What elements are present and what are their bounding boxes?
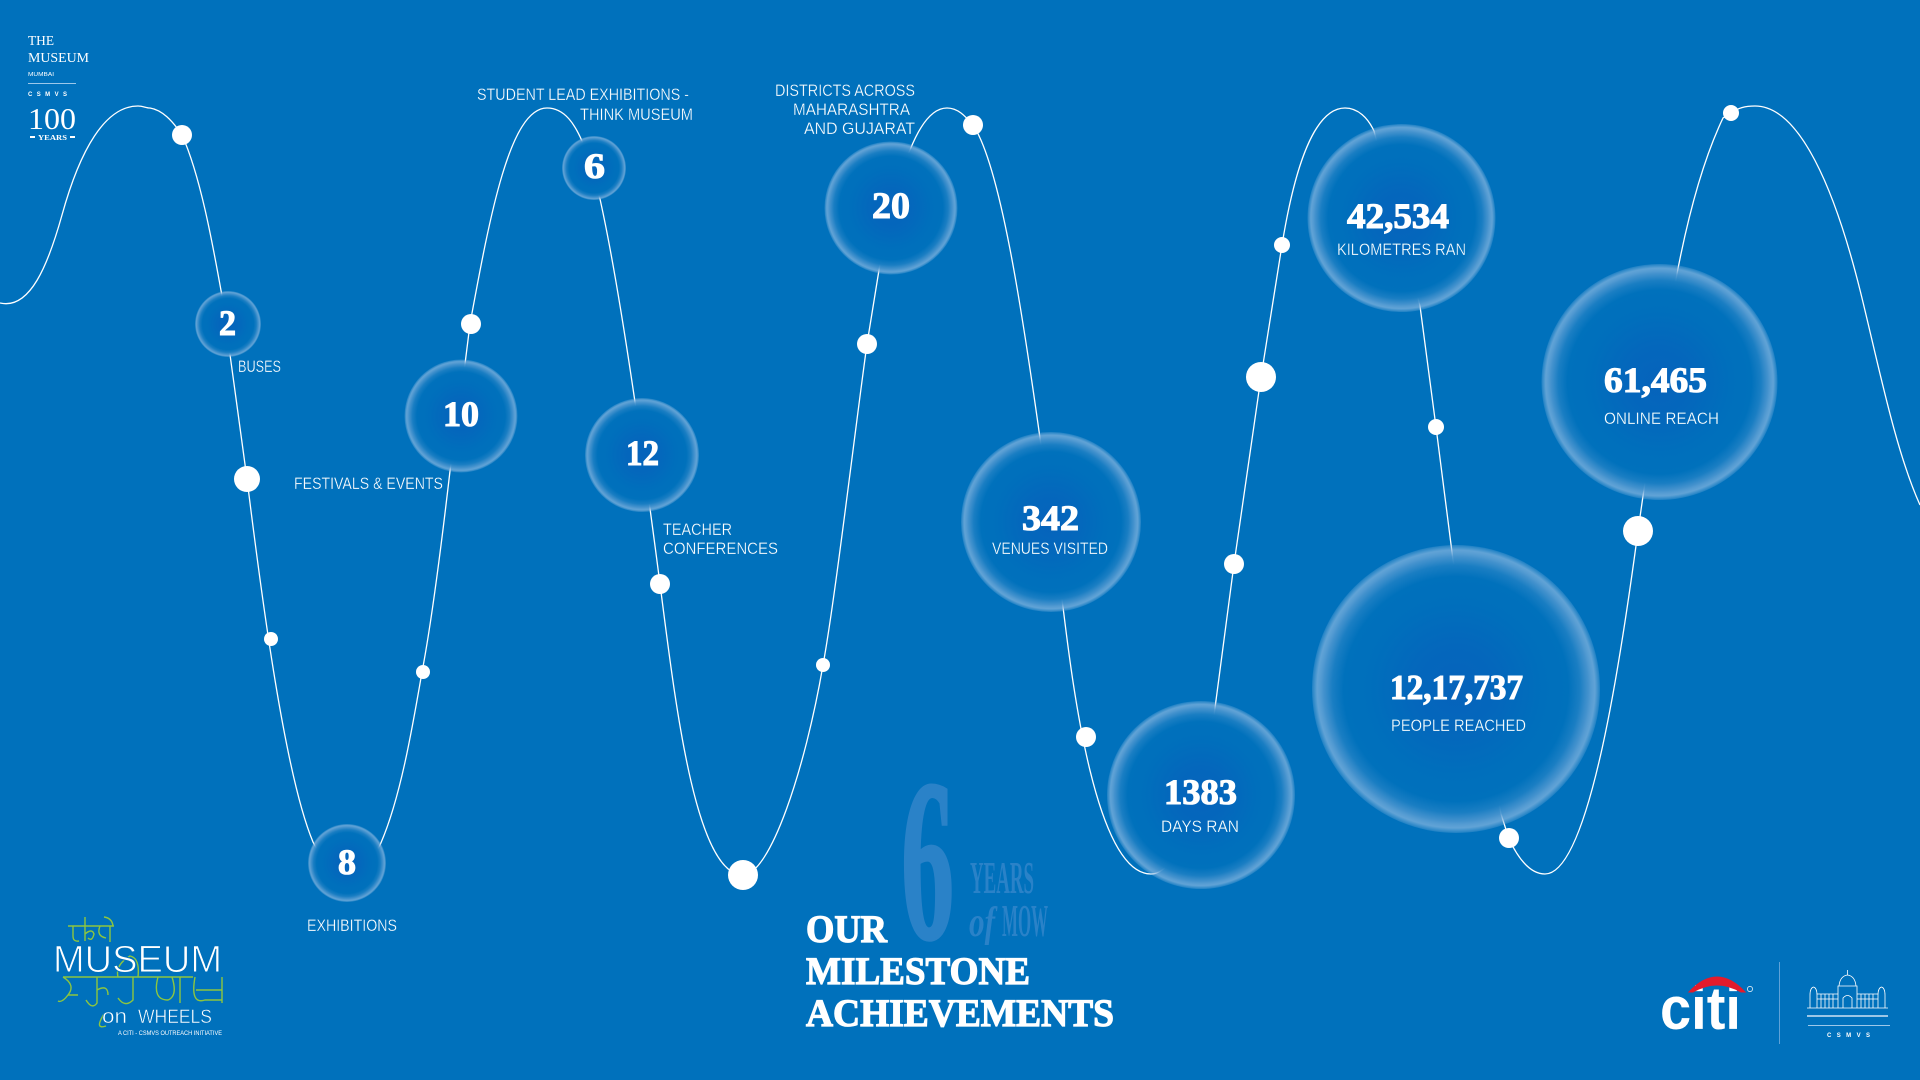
milestone: 12,17,737 people reached: 12,17,737 bbox=[1390, 668, 1523, 707]
logo: citi: citi bbox=[1660, 975, 1741, 1042]
milestone: 2 buses: 2 bbox=[219, 303, 236, 343]
divider bbox=[1779, 962, 1780, 1044]
milestone: 10 festivals and events: 10 bbox=[443, 394, 479, 434]
milestone: 61,465 online reach: 61,465 bbox=[1604, 360, 1707, 400]
milestone: 20 districts: 20 bbox=[872, 186, 910, 227]
logo: The Museum Mumbai 100 years: THE bbox=[28, 34, 54, 49]
logo: The Museum Mumbai 100 years: YEARS bbox=[38, 134, 67, 142]
watermark: 6 years of MoW bbox=[901, 732, 1048, 988]
milestone: 342 venues visited bbox=[961, 432, 1141, 612]
milestone: 61,465 online reach bbox=[1542, 264, 1778, 500]
logo: Museum on Wheels: WHEELS bbox=[138, 1007, 212, 1028]
logo: The Museum Mumbai 100 years: CSMVS bbox=[28, 92, 67, 98]
text: MOW bbox=[1002, 895, 1048, 946]
milestone: 20 districts: MAHARASHTRA bbox=[793, 101, 910, 119]
milestone: 12 teacher conferences bbox=[585, 398, 778, 558]
logo: CSMVS building: CSMVS bbox=[1827, 1033, 1870, 1039]
logo: Museum on Wheels: MUSEUM bbox=[53, 939, 222, 981]
milestone: 1383 days ran: 1383 bbox=[1164, 772, 1237, 812]
milestone: 42,534 kilometres ran: KILOMETRES RAN bbox=[1337, 241, 1466, 259]
milestone: 6 student lead exhibitions: 6 bbox=[584, 146, 605, 186]
milestone: 8 exhibitions: 8 bbox=[338, 842, 356, 882]
logo: The Museum Mumbai 100 years bbox=[28, 34, 90, 142]
watermark: 6 years of MoW: 6 bbox=[901, 732, 954, 988]
milestone: 10 festivals and events bbox=[294, 360, 518, 493]
milestone: 6 student lead exhibitions: STUDENT LEAD EXHIBITIONS - bbox=[477, 86, 689, 104]
milestone: 342 venues visited: VENUES VISITED bbox=[992, 540, 1108, 558]
milestone: 42,534 kilometres ran bbox=[1308, 124, 1496, 312]
logo: Museum on Wheels bbox=[53, 917, 222, 1037]
logo: Museum on Wheels: on bbox=[102, 1006, 127, 1028]
milestone: 20 districts bbox=[775, 82, 958, 274]
milestone: 12 teacher conferences: TEACHER bbox=[663, 521, 732, 539]
milestone: 6 student lead exhibitions bbox=[477, 86, 693, 200]
watermark: 6 years of MoW: YEARS bbox=[970, 852, 1034, 903]
milestone: 12 teacher conferences: 12 bbox=[626, 433, 659, 473]
milestone: 12,17,737 people reached bbox=[1312, 545, 1600, 833]
milestone: 6 student lead exhibitions: THINK MUSEUM bbox=[580, 106, 693, 124]
milestone: 8 exhibitions: EXHIBITIONS bbox=[307, 917, 397, 935]
milestone: 10 festivals and events: FESTIVALS & EVENTS bbox=[294, 475, 443, 493]
milestone: 20 districts: DISTRICTS ACROSS bbox=[775, 82, 915, 100]
timeline dots bbox=[172, 105, 1739, 890]
milestone: 20 districts: AND GUJARAT bbox=[804, 120, 915, 138]
title: MILESTONE bbox=[806, 950, 1030, 993]
milestone: 61,465 online reach: ONLINE REACH bbox=[1604, 410, 1719, 428]
milestone: 2 buses: BUSES bbox=[238, 358, 281, 376]
milestone: 1383 days ran: DAYS RAN bbox=[1161, 818, 1239, 836]
milestone: 8 exhibitions bbox=[307, 824, 397, 935]
timeline curve bbox=[0, 106, 1920, 875]
logo: The Museum Mumbai 100 years: MUMBAI bbox=[28, 72, 55, 78]
title: OUR bbox=[806, 908, 888, 951]
title: ACHIEVEMENTS bbox=[806, 992, 1114, 1035]
milestone: 2 buses bbox=[195, 291, 281, 376]
milestone: 342 venues visited: 342 bbox=[1022, 498, 1079, 538]
logo: The Museum Mumbai 100 years: 100 bbox=[28, 101, 76, 136]
milestone: 1383 days ran bbox=[1107, 701, 1295, 889]
milestone: 12 teacher conferences: CONFERENCES bbox=[663, 540, 778, 558]
logo: Museum on Wheels: A CITI - CSMVS OUTREACH INITIATIVE bbox=[118, 1031, 222, 1037]
title bbox=[806, 908, 1114, 1035]
logo: CSMVS building bbox=[1807, 970, 1890, 1039]
logo: The Museum Mumbai 100 years: MUSEUM bbox=[28, 51, 90, 66]
milestone: 42,534 kilometres ran: 42,534 bbox=[1347, 196, 1449, 236]
milestone: 12,17,737 people reached: PEOPLE REACHED bbox=[1391, 717, 1526, 735]
watermark: 6 years of MoW: of bbox=[969, 900, 998, 946]
logo mark: green calligraphic strokes bbox=[58, 917, 222, 1027]
